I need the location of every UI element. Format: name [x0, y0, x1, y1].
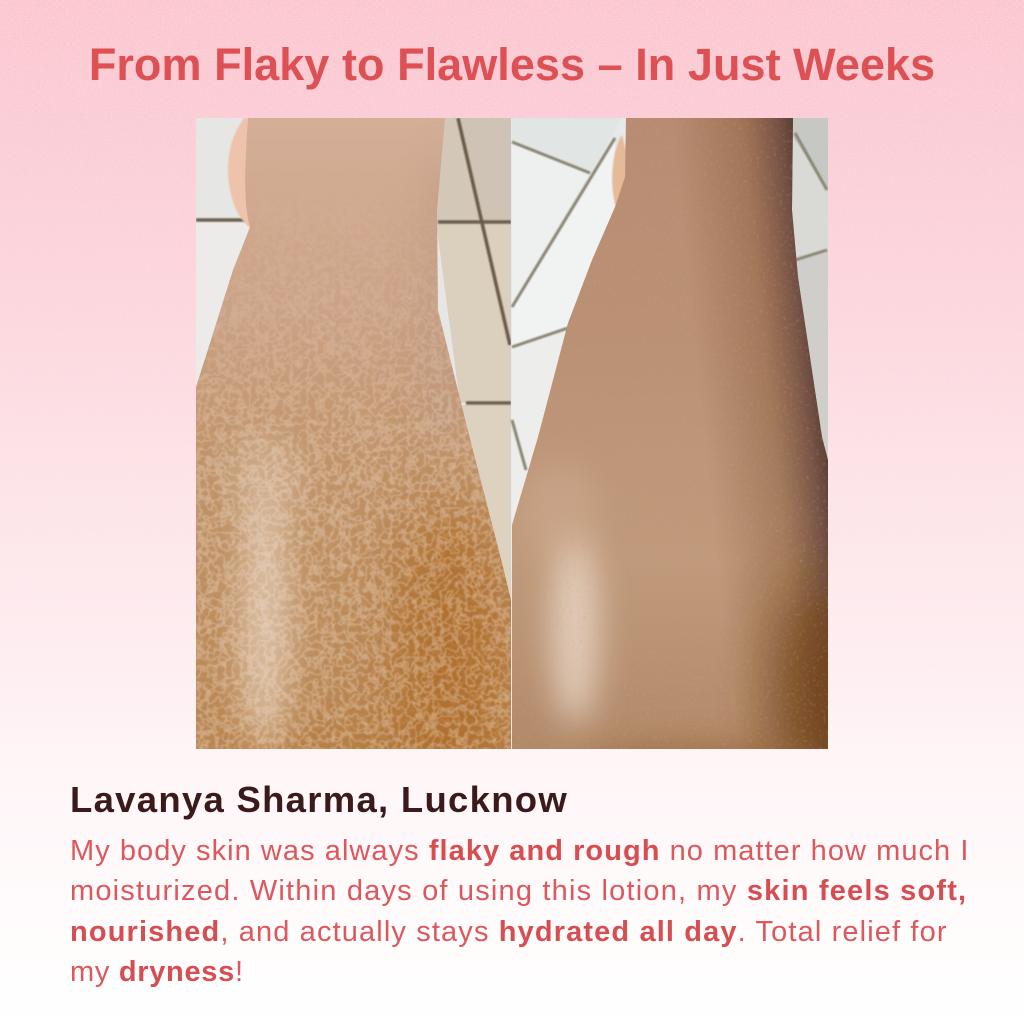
- right photo: smooth skin after: [510, 118, 828, 749]
- testimonial text: My body skin was always flaky and rough no matter how much I: [70, 835, 969, 867]
- reviewer name: Lavanya Sharma, Lucknow: [70, 779, 568, 820]
- title: From Flaky to Flawless – In Just Weeks: [89, 39, 935, 90]
- background gradient: [0, 0, 1024, 804]
- testimonial text: moisturized. Within days of using this lotion, my skin feels soft,: [70, 875, 967, 907]
- before and after photo panel: [196, 118, 828, 749]
- testimonial text: nourished, and actually stays hydrated all day. Total relief for: [70, 916, 948, 948]
- left photo: flaky skin before: [196, 118, 511, 749]
- testimonial text: my dryness!: [70, 956, 244, 988]
- testimonial text: [70, 835, 969, 988]
